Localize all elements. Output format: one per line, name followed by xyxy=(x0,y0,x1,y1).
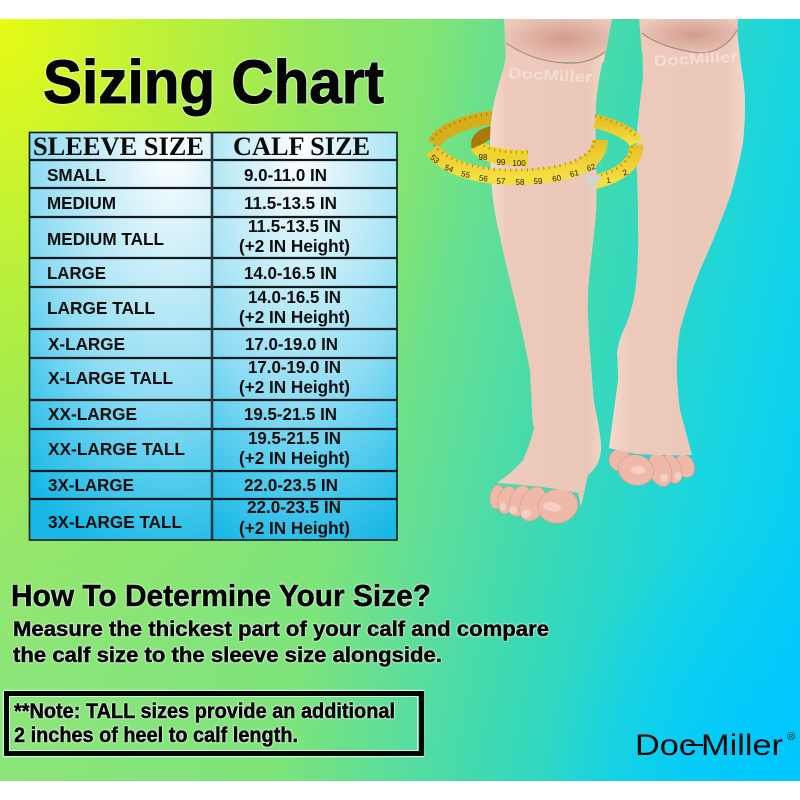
row: xx-large tall: 19.5-21.5 IN xyxy=(248,428,341,448)
left knee xyxy=(504,19,612,62)
brand logo: Doc xyxy=(635,729,696,762)
tape tick marks xyxy=(434,137,595,170)
tape numbers: 62 xyxy=(585,162,597,173)
row: medium tall: (+2 IN Height) xyxy=(239,236,350,256)
right foot toes xyxy=(609,449,698,490)
right hem line xyxy=(642,30,737,53)
tape main front band xyxy=(432,140,600,177)
tape numbers: 55 xyxy=(460,169,472,180)
row: large tall: (+2 IN Height) xyxy=(239,307,350,327)
tape numbers xyxy=(428,153,629,187)
left foot toes xyxy=(488,483,582,528)
tape numbers: 53 xyxy=(428,153,441,166)
instructions text: Measure the thickest part of your calf and compare xyxy=(13,618,549,641)
table grid lines xyxy=(29,132,397,540)
row: large: 14.0-16.5 IN xyxy=(244,263,337,283)
note text xyxy=(14,700,395,747)
row: x-large: X-LARGE xyxy=(48,334,125,354)
row: medium tall: 11.5-13.5 IN xyxy=(248,216,341,236)
right sleeve xyxy=(609,30,745,455)
right knee xyxy=(639,19,738,54)
row: xx-large tall xyxy=(48,428,350,468)
left sleeve logo: DocMiller xyxy=(508,65,593,86)
row: xx-large: 19.5-21.5 IN xyxy=(244,404,337,424)
table cell backgrounds xyxy=(29,132,397,540)
tape numbers: 57 xyxy=(497,177,506,186)
brand logo: Miller xyxy=(701,729,783,762)
row: medium tall: MEDIUM TALL xyxy=(47,229,164,249)
note callout xyxy=(4,690,424,756)
heading: how to determine: How To Determine Your Size? xyxy=(11,579,431,613)
row: x-large xyxy=(48,334,338,354)
tape right front section xyxy=(595,145,636,182)
row: large xyxy=(47,263,337,283)
left sleeve xyxy=(490,43,605,507)
sizing table xyxy=(29,132,397,540)
row: xx-large: XX-LARGE xyxy=(48,404,137,424)
tape numbers: 59 xyxy=(534,177,543,186)
row: large: LARGE xyxy=(47,263,106,283)
tape inner front end xyxy=(478,146,528,158)
row: x-large tall: 17.0-19.0 IN xyxy=(248,357,341,377)
row: medium xyxy=(47,193,337,213)
note box border xyxy=(4,690,424,756)
instructions text: the calf size to the sleeve size alongside. xyxy=(13,644,442,667)
row: large tall xyxy=(47,287,350,327)
title: Sizing Chart xyxy=(43,48,384,116)
row: small xyxy=(47,165,327,185)
table header: SLEEVE SIZE xyxy=(33,132,204,161)
row: large tall: LARGE TALL xyxy=(47,298,155,318)
illustration: tape back section xyxy=(432,113,498,147)
row: medium: 11.5-13.5 IN xyxy=(244,193,337,213)
tape numbers: 54 xyxy=(443,163,455,175)
tape numbers: 61 xyxy=(569,168,580,179)
table header: CALF SIZE xyxy=(233,132,370,161)
tape numbers: 98 xyxy=(479,153,488,162)
tape numbers: 60 xyxy=(552,173,562,184)
instructions text xyxy=(13,618,549,667)
table header xyxy=(33,132,370,161)
note text: 2 inches of heel to calf length. xyxy=(14,724,298,747)
brand logo: ® xyxy=(787,731,795,743)
row: x-large tall: (+2 IN Height) xyxy=(239,377,350,397)
row: 3x-large tall: (+2 IN Height) xyxy=(239,518,350,538)
tape numbers: 99 xyxy=(497,158,506,167)
row: medium: MEDIUM xyxy=(47,193,116,213)
illustration: left leg with sleeve xyxy=(488,19,612,528)
row: small: 9.0-11.0 IN xyxy=(244,165,327,185)
brand logo xyxy=(635,729,795,762)
row: 3x-large: 22.0-23.5 IN xyxy=(244,475,338,495)
row: x-large tall: X-LARGE TALL xyxy=(48,368,173,388)
row: 3x-large xyxy=(48,475,338,495)
illustration: right leg with sleeve xyxy=(609,19,745,490)
row: x-large: 17.0-19.0 IN xyxy=(245,334,338,354)
row: x-large tall xyxy=(48,357,350,397)
tape numbers: 100 xyxy=(512,159,526,168)
row: medium tall xyxy=(47,216,350,256)
note text: **Note: TALL sizes provide an additional xyxy=(14,700,395,723)
tape clasp xyxy=(586,174,602,189)
row: xx-large tall: (+2 IN Height) xyxy=(239,448,350,468)
row: large tall: 14.0-16.5 IN xyxy=(248,287,341,307)
row: 3x-large: 3X-LARGE xyxy=(48,475,134,495)
row: small: SMALL xyxy=(47,165,106,185)
tape numbers: 2 xyxy=(622,167,629,178)
row: xx-large xyxy=(48,404,337,424)
row: 3x-large tall xyxy=(48,497,350,538)
tape numbers: 56 xyxy=(478,173,489,184)
right sleeve logo: DocMiller xyxy=(653,49,738,70)
row: 3x-large tall: 22.0-23.5 IN xyxy=(247,497,341,517)
tape right back section xyxy=(595,121,636,143)
tape numbers: 58 xyxy=(516,178,525,187)
tape numbers: 1 xyxy=(606,176,612,185)
row: 3x-large tall: 3X-LARGE TALL xyxy=(48,512,182,532)
row: xx-large tall: XX-LARGE TALL xyxy=(48,439,185,459)
illustration: measuring tape front xyxy=(432,116,638,189)
left hem line xyxy=(506,43,605,63)
